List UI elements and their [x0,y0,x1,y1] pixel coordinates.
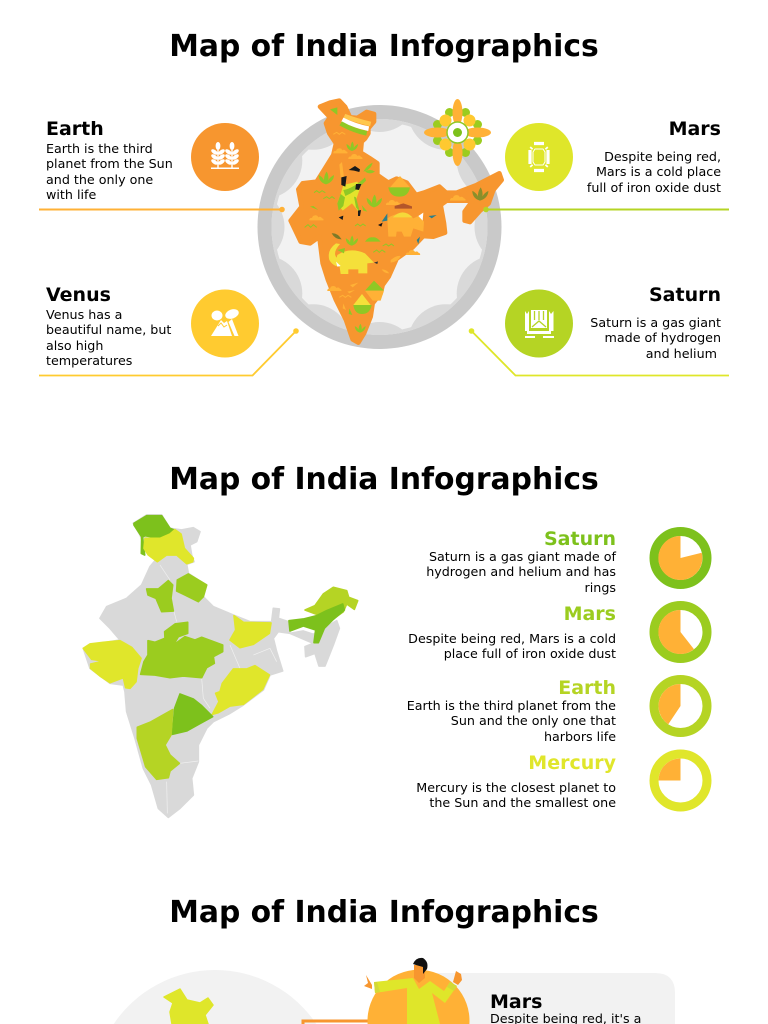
text: Saturn: rings [585,580,616,595]
small clouds [309,148,466,310]
text: Earth: with life [46,187,96,202]
text: Venus: temperatures [46,353,132,368]
text: Venus [46,307,172,368]
connector: Mars [483,207,729,212]
donut: Mars [654,606,707,658]
text: Earth [407,698,616,744]
text: Saturn: hydrogen and helium and has [426,564,616,579]
heading: Mercury: Mercury [528,752,616,774]
flower ornament [424,99,491,166]
connector: Earth [39,207,285,212]
text: Mercury: the Sun and the smallest one [429,795,616,810]
text: Mars: Mars is a cold place [596,164,721,179]
state: Arunachal Pradesh [305,587,358,618]
text: Saturn: made of hydrogen [604,330,721,345]
text: Earth: harbors life [544,729,616,744]
text: Earth: Earth is the third [46,141,153,156]
title 1: Map of India Infographics [169,29,599,64]
heading: Mars: Mars [564,603,616,625]
camel [378,203,437,244]
text: Venus: beautiful name, but [46,322,171,337]
icon: palace on green circle [505,290,573,358]
state: Himachal region [144,530,193,564]
heading: Earth: Earth [46,118,104,140]
text: Mercury: Mercury is the closest planet to [416,780,616,795]
dancer figure on orange circle [364,958,469,1024]
text: Saturn [590,315,721,361]
text: Saturn: Saturn is a gas giant [590,315,721,330]
state: Assam [289,604,344,643]
connector to figure [303,1021,370,1024]
donut: Earth [654,680,707,732]
text: Earth: Earth is the third planet from the [407,698,616,713]
text: Mercury [416,780,616,810]
text: Mars: Despite being red, [604,149,721,164]
connector: Venus [39,328,299,376]
spice mounds [353,281,384,314]
title 3: Map of India Infographics [169,895,599,930]
title 2: Map of India Infographics [169,462,599,497]
small zigzags [305,191,394,252]
scalloped circle behind map [258,105,502,349]
text: Venus: also high [46,338,103,353]
Mars panel background [418,973,675,1024]
heading: Venus: Venus [46,284,111,306]
text: Mars [587,149,721,195]
donut: Saturn [654,532,707,584]
state: Odisha [212,666,269,714]
text: Venus: Venus has a [46,307,122,322]
text: Mars: Despite being red, Mars is a cold [408,631,616,646]
elephant [329,243,378,274]
text: Mars: place full of iron oxide dust [444,646,616,661]
state: Haryana [147,581,173,612]
heading: Saturn: Saturn [649,284,721,306]
state: Karnataka [137,710,179,779]
text: Earth: Sun and the only one that [451,713,616,728]
state: Madhya Pradesh [141,622,223,678]
state: Jammu and Kashmir [134,516,174,555]
leaf above elephant [332,233,342,239]
donut: Mercury [654,754,707,807]
text: Earth [46,141,173,202]
icon: gem on lime circle [505,123,573,191]
text: Earth: and the only one [46,172,153,187]
dancer figure [337,162,366,220]
text: Saturn: and helium [646,346,717,361]
state: Telangana [172,694,213,734]
text: Saturn [426,549,616,595]
state: Bihar [230,616,271,648]
icon: wheat on orange circle [191,123,259,191]
text: Earth: planet from the Sun [46,156,173,171]
states map of India [83,515,358,817]
heading: Earth: Earth [558,677,616,699]
text: Saturn: Saturn is a gas giant made of [429,549,616,564]
connector: Saturn [469,328,729,376]
state: Uttarakhand [177,574,207,602]
flag [341,116,371,133]
mountain bowl top [388,176,410,197]
icon: volcano on yellow circle [191,290,259,358]
illustrated map of India [291,101,502,343]
heading: Mars panel: Mars [490,991,542,1013]
heading: Mars: Mars [669,118,721,140]
state: Gujarat [83,641,141,688]
text: Mars: full of iron oxide dust [587,180,721,195]
gray circle with map [114,970,316,1024]
heading: Saturn: Saturn [544,528,616,550]
grass tufts and leaves [310,107,488,333]
text: Mars [408,631,616,661]
